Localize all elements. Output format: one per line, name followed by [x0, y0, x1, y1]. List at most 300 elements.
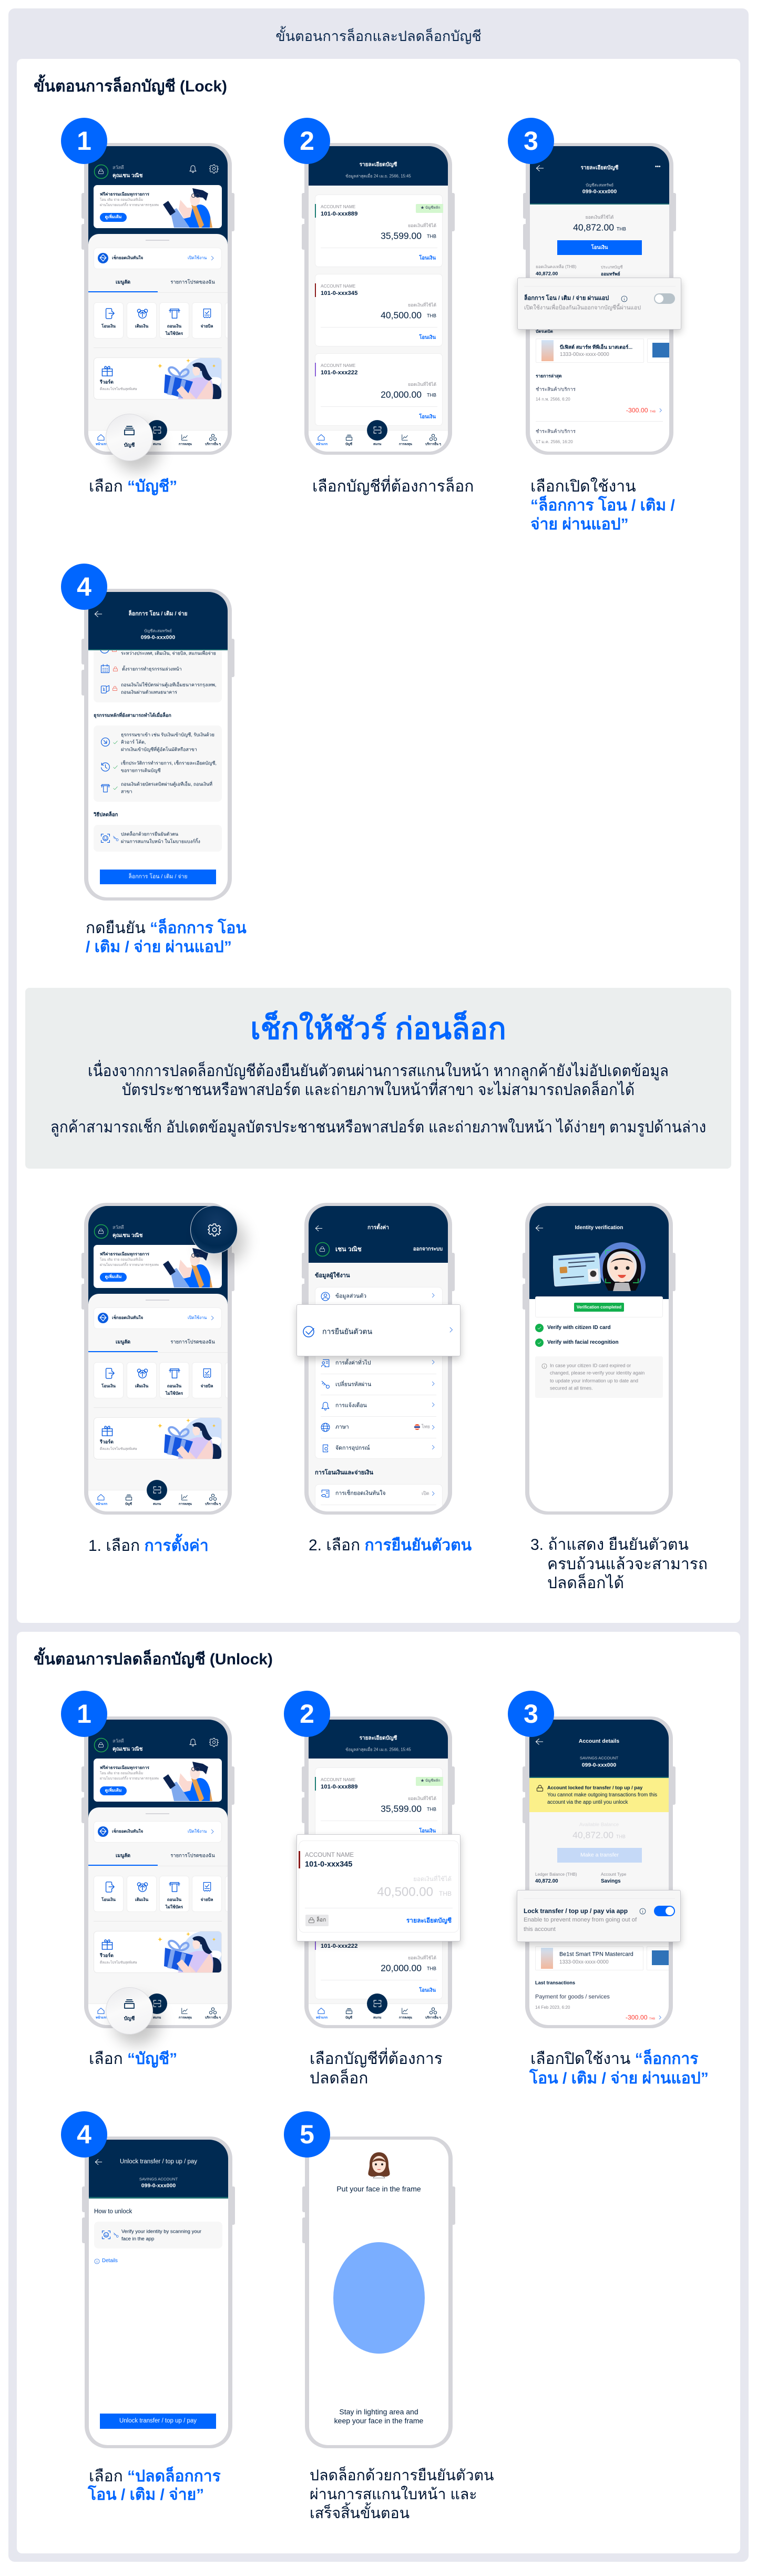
phone: confirm lock: ล็อกการ โอน / เติม / จ่าย — [128, 874, 188, 880]
unlock step 5 — [284, 2111, 494, 2522]
phone: home with settings: ถอนเงิน — [167, 1384, 181, 1388]
phone: locked account details: account via the app until you unlock — [547, 1800, 628, 1805]
unlock caption 5: ปลดล็อกด้วยการยืนยันตัวตน — [310, 2467, 494, 2484]
phone: home screen: คุณเชน วณิช — [112, 173, 142, 179]
phone: locked account details: 14 Feb 2023, 6:20 — [535, 2005, 570, 2010]
phone: home with settings: เมนูลัด — [116, 1339, 130, 1345]
popup: identity verification: การยืนยันตัวตน — [322, 1327, 372, 1336]
phone: locked account details: Account Type — [601, 1872, 626, 1877]
phone: identity verification: to update your information up to date and — [550, 1378, 638, 1383]
caption 3: เลือกเปิดใช้งาน — [530, 478, 636, 495]
account card 2: ยอดเงินที่ใช้ได้ — [408, 302, 436, 308]
unlock badge 4 — [61, 2111, 107, 2158]
unlock caption 5 line 2: ผ่านการสแกนใบหน้า และ — [310, 2486, 477, 2503]
phone: identity verification: Identity verification — [575, 1225, 623, 1231]
account card 3 — [315, 1927, 443, 1999]
phone: confirm lock: คิวอาร์ โค้ด, — [121, 740, 146, 745]
phone: locked account details: 099-0-xxx000 — [582, 1762, 616, 1769]
popup: lock toggle off: เปิดใช้งานเพื่อป้องกันเงินออกจากบัญชีนี้ผ่านแอป — [524, 305, 641, 311]
badge 2 — [284, 118, 330, 164]
phone: home with settings: คุณเชน วณิช — [112, 1233, 142, 1239]
phone: locked account details: Make a transfer — [580, 1852, 619, 1858]
unlock badge 2 — [284, 1691, 330, 1737]
phone: account list: บัญชี — [345, 443, 352, 446]
body text line 3: ลูกค้าสามารถเช็ก อัปเดตข้อมูลบัตรประชาชนหรือพาสปอร์ต และถ่ายภาพใบหน้า ได้ง่ายๆ ตามรูปด้านล่าง — [50, 1119, 706, 1136]
popup: locked account — [296, 1834, 461, 1941]
body text line 2: บัตรประชาชนหรือพาสปอร์ต และถ่ายภาพใบหน้าที่สาขา จะไม่สามารถปลดล็อกได้ — [122, 1081, 635, 1099]
phone: home screen: โอนเงิน — [101, 1897, 116, 1902]
phone: account details: 14 ก.พ. 2566, 6:20 — [536, 397, 570, 402]
phone: home screen: เช็กยอดเงินทันใจ — [112, 1829, 143, 1834]
account card 3: โอนเงิน — [419, 414, 436, 420]
phone: locked account details: Be1st Smart TPN Mastercard — [559, 1951, 633, 1958]
account card 1: 101-0-xxx889 — [321, 1784, 357, 1790]
unlock caption 2: เลือกบัญชีที่ต้องการ — [310, 2050, 443, 2068]
phone: home screen: ดีลและโปรโมชันสุดพิเศษ — [100, 1961, 137, 1965]
unlock badge 4: 4 — [77, 2120, 91, 2149]
phone: confirm lock: ปลดล็อกด้วยการยืนยันตัวตน — [121, 832, 178, 837]
phone: home screen: ถอนเงิน — [167, 1897, 181, 1902]
phone: home with settings: สแกน — [153, 1502, 161, 1506]
magnifier: account tab — [106, 414, 153, 461]
phone: home with settings: ดูเพิ่มเติม — [105, 1274, 121, 1279]
account card 3: 101-0-xxx222 — [321, 370, 357, 376]
phone: account list — [302, 143, 455, 455]
magnifier: account tab: บัญชี — [124, 442, 135, 448]
phone: identity verification: Verification completed — [577, 1305, 621, 1310]
phone: home screen: ไม่ใช้บัตร — [166, 331, 183, 336]
phone: confirm lock — [81, 589, 234, 901]
phone: account details: ออมทรัพย์ — [601, 271, 620, 277]
popup: lock toggle off — [517, 278, 681, 330]
unlock caption 4: เลือก “ปลดล็อกการ — [89, 2468, 221, 2485]
account card 2: 40,500.00 — [381, 310, 422, 321]
phone: account list: สแกน — [373, 2016, 381, 2019]
phone: locked account details: SAVINGS ACCOUNT — [580, 1755, 618, 1760]
phone: account details: ยอดเงินที่ใช้ได้ — [586, 214, 613, 220]
phone: home screen: โอน เติม จ่าย ถอนเงินเอทีเอ็ม — [100, 1772, 143, 1775]
account card 3: THB — [427, 393, 436, 398]
phone: home screen: ผ่านโมบายแบงก์กิ้ง จากธนาคารกรุงเทพ — [100, 1777, 159, 1781]
check caption 3: 3. ถ้าแสดง ยืนยันตัวตน — [530, 1536, 689, 1553]
phone: unlock confirm — [82, 2137, 235, 2448]
popup: lock toggle off: ล็อกการ โอน / เติม / จ่าย ผ่านแอป — [524, 295, 609, 301]
badge 3 — [508, 118, 554, 164]
phone: home screen — [81, 1716, 234, 2051]
unlock caption 4 line 2: โอน / เติม / จ่าย” — [88, 2486, 204, 2503]
popup: lock toggle on: this account — [524, 1926, 556, 1933]
phone: account list: ข้อมูลล่าสุดเมื่อ 24 เม.ย. 2566, 15:45 — [345, 1747, 411, 1752]
phone: locked account details: Savings — [601, 1878, 621, 1884]
unlock caption 5 line 3: เสร็จสิ้นขั้นตอน — [310, 2505, 410, 2522]
popup: lock toggle on: Enable to prevent money from going out of — [524, 1917, 637, 1923]
account card 3: 20,000.00 — [381, 1963, 422, 1974]
popup: locked account: ล็อก — [316, 1917, 326, 1923]
account card 3: ACCOUNT NAME — [321, 363, 355, 368]
phone: home screen: ฟรีค่าธรรมเนียมทุกรายการ — [100, 192, 149, 197]
account card 1: 35,599.00 — [381, 230, 422, 241]
caption 4: กดยืนยัน “ล็อกการ โอน — [86, 919, 247, 937]
phone: account details: บัญชีสะสมทรัพย์ — [586, 183, 613, 187]
caption 4 line 2: / เติม / จ่าย ผ่านแอป” — [86, 938, 232, 956]
phone: home screen: ดีลและโปรโมชันสุดพิเศษ — [100, 387, 137, 391]
phone: confirm lock: ถอนเงินไม่ใช้บัตรผ่านตู้เอทีเอ็มธนาคารกรุงเทพ, — [121, 682, 216, 688]
unlock badge 3: 3 — [524, 1699, 538, 1729]
phone: locked account details: Available Balance — [579, 1822, 619, 1827]
panel: lock steps — [17, 59, 740, 1623]
phone: confirm lock: วิธีปลดล็อก — [94, 812, 118, 817]
phone: settings: การตั้งค่า — [367, 1225, 389, 1231]
popup: lock toggle on — [517, 1890, 681, 1942]
unlock step 3 — [508, 1691, 709, 2087]
phone: account details: ••• — [655, 164, 661, 170]
phone: home with settings: เติมเงิน — [135, 1384, 148, 1388]
phone: account list: สแกน — [373, 443, 381, 446]
caption 3 emphasis line 2: จ่าย ผ่านแอป” — [530, 516, 629, 533]
unlock badge 1 — [61, 1691, 107, 1737]
phone: locked account details — [513, 1716, 684, 2028]
account card 3: THB — [427, 1966, 436, 1971]
account card 1: โอนเงิน — [419, 255, 436, 261]
phone: home with settings: บัญชี — [125, 1502, 132, 1506]
phone: account list — [293, 1716, 464, 2028]
phone: unlock confirm: Details — [102, 2258, 118, 2264]
phone: home with settings: ฟรีค่าธรรมเนียมทุกรายการ — [100, 1252, 149, 1256]
phone: home screen: เปิดใช้งาน — [188, 1829, 207, 1834]
phone: home screen: รีวอร์ด — [100, 380, 114, 385]
phone: account list: บริการอื่น ๆ — [425, 2016, 441, 2019]
account card 3: ยอดเงินที่ใช้ได้ — [408, 382, 436, 387]
phone: account details: บีเฟิสต์ สมาร์ท ทีพีเอ็น มาสเตอร์... — [560, 344, 632, 350]
phone: settings: ข้อมูลส่วนตัว — [335, 1293, 366, 1300]
phone: unlock confirm: Unlock transfer / top up / pay — [119, 2418, 197, 2424]
phone: settings: การโอนเงินและจ่ายเงิน — [315, 1469, 373, 1476]
phone: home screen: การลงทุน — [179, 443, 192, 446]
phone: account list: ข้อมูลล่าสุดเมื่อ 24 เม.ย. 2566, 15:45 — [345, 173, 411, 178]
account card 2: 101-0-xxx345 — [321, 290, 357, 297]
phone: home screen: เมนูลัด — [116, 1853, 130, 1858]
popup: identity verification — [296, 1304, 461, 1356]
phone: account details: รายการล่าสุด — [536, 373, 561, 379]
phone: account details: บัตรเดบิต — [536, 329, 553, 334]
panel: check before locking — [25, 988, 731, 1169]
phone: unlock confirm: face in the app — [121, 2236, 154, 2242]
account card 2 — [315, 274, 443, 346]
account card 1 — [315, 1767, 443, 1840]
phone: home screen: สแกน — [153, 443, 161, 446]
phone: identity verification: Verify with citizen ID card — [547, 1325, 611, 1331]
magnifier: settings gear — [190, 1205, 238, 1254]
badge 1 — [61, 118, 107, 164]
phone: account list: บริการอื่น ๆ — [425, 443, 441, 446]
phone: settings: ภาษา — [335, 1424, 349, 1430]
phone: home screen: เติมเงิน — [135, 324, 148, 329]
phone: confirm lock: ผ่านการสแกนใบหน้า ในโมบายแบงก์กิ้ง — [121, 839, 200, 844]
phone: identity verification — [523, 1203, 676, 1515]
phone: home screen — [81, 143, 234, 478]
phone: home screen: การลงทุน — [179, 2016, 192, 2019]
account card 1: ยอดเงินที่ใช้ได้ — [408, 1796, 436, 1801]
phone: confirm lock: ฝากเงินเข้าบัญชีที่ตู้อัตโนมัติหรือสาขา — [121, 747, 197, 752]
account card 1: ACCOUNT NAME — [321, 1777, 355, 1782]
caption 1: เลือก “บัญชี” — [89, 478, 177, 495]
phone: account details: 17 ม.ค. 2566, 16:20 — [536, 439, 573, 444]
heading: lock steps: ขั้นตอนการล็อกบัญชี (Lock) — [34, 78, 227, 95]
phone: confirm lock: ตั้งรายการทำธุรกรรมล่วงหน้า — [122, 667, 182, 672]
phone: home with settings: ไม่ใช้บัตร — [166, 1391, 183, 1396]
phone: home with settings: จ่ายบิล — [201, 1384, 213, 1388]
check caption 3 line 2: ครบถ้วนแล้วจะสามารถ — [547, 1556, 708, 1573]
avatar — [368, 2152, 390, 2179]
unlock badge 2: 2 — [300, 1699, 314, 1729]
phone: account details — [514, 143, 685, 455]
phone: confirm lock: ถอนเงินผ่านตัวแทนธนาคาร — [121, 690, 177, 695]
phone: account details: ชำระสินค้า/บริการ — [536, 428, 576, 434]
account card 1: โอนเงิน — [419, 1828, 436, 1834]
phone: home screen: ไม่ใช้บัตร — [166, 1905, 183, 1909]
phone: home screen: ดูเพิ่มเติม — [105, 1788, 121, 1793]
phone: face scan: keep your face in the frame — [334, 2417, 423, 2425]
phone: confirm lock: ถอนเงินด้วยบัตรเดบิตผ่านตู้เอทีเอ็ม, ถอนเงินที่ — [121, 782, 212, 787]
phone: home with settings: โอน เติม จ่าย ถอนเงินเอทีเอ็ม — [100, 1258, 143, 1262]
popup: lock toggle on: Lock transfer / top up / pay via app — [524, 1907, 628, 1915]
unlock step 2 — [284, 1691, 464, 2087]
phone: home screen: คุณเชน วณิช — [112, 1746, 142, 1752]
phone: account details: ยอดเงินคงเหลือ (THB) — [536, 264, 576, 269]
phone: settings: การตั้งค่าทั่วไป — [335, 1360, 371, 1366]
check caption 1: 1. เลือก การตั้งค่า — [88, 1537, 209, 1555]
account card 1: 101-0-xxx889 — [321, 211, 357, 217]
illustration: ID card and face — [553, 1242, 646, 1291]
phone: account details: 1333-00xx-xxxx-0000 — [560, 352, 609, 357]
account card 1: ★ บัญชีหลัก — [421, 206, 440, 210]
step 2: lock — [284, 118, 474, 495]
account card 2: THB — [427, 313, 436, 319]
caption 3 emphasis: “ล็อกการ โอน / เติม / — [530, 497, 675, 514]
check caption 3 line 3: ปลดล็อกได้ — [547, 1575, 624, 1592]
phone: identity verification: In case your citizen ID card expired or — [550, 1363, 631, 1368]
badge 2: 2 — [300, 126, 314, 156]
account card 3: 20,000.00 — [381, 389, 422, 400]
phone: account list: รายละเอียดบัญชี — [360, 162, 397, 168]
phone: unlock confirm: How to unlock — [94, 2209, 132, 2215]
phone: identity verification: secured at all times. — [550, 1385, 593, 1391]
phone: unlock confirm: 099-0-xxx000 — [141, 2183, 176, 2189]
badge 3: 3 — [524, 126, 538, 156]
unlock badge 5: 5 — [300, 2120, 314, 2149]
phone: account details: 099-0-xxx000 — [582, 189, 617, 195]
phone: home with settings: เปิดใช้งาน — [188, 1315, 207, 1320]
phone: home screen: เมนูลัด — [116, 279, 130, 285]
phone: home screen: บริการอื่น ๆ — [205, 443, 221, 446]
phone: home screen: รายการโปรดของฉัน — [170, 1853, 215, 1858]
magnifier: account tab — [106, 1987, 153, 2035]
unlock caption 3: เลือกปิดใช้งาน “ล็อกการ — [530, 2050, 698, 2068]
phone: account details: รายละเอียดบัญชี — [581, 165, 618, 171]
phone: confirm lock: บัญชีสะสมทรัพย์ — [144, 629, 172, 633]
phone: confirm lock: 099-0-xxx000 — [141, 635, 175, 641]
phone: locked account details: 1333-00xx-xxxx-0000 — [559, 1959, 609, 1965]
phone: settings: ข้อมูลผู้ใช้งาน — [315, 1272, 350, 1279]
phone: home screen: เปิดใช้งาน — [188, 255, 207, 260]
badge 4 — [61, 564, 107, 610]
phone: account details: 40,872.00 THB — [573, 222, 626, 232]
account card 1: 35,599.00 — [381, 1803, 422, 1814]
phone: settings: จัดการอุปกรณ์ — [335, 1445, 370, 1451]
phone: home with settings: เช็กยอดเงินทันใจ — [112, 1315, 143, 1320]
phone: home screen: โอน เติม จ่าย ถอนเงินเอทีเอ็ม — [100, 198, 143, 202]
phone: unlock confirm: Verify your identity by scanning your — [121, 2229, 201, 2234]
unlock badge 5 — [284, 2111, 330, 2158]
check step 2 — [293, 1203, 472, 1554]
body text line 1: เนื่องจากการปลดล็อกบัญชีต้องยืนยันตัวตนผ่านการสแกนใบหน้า หากลูกค้ายังไม่อัปเดตข้อมูล — [88, 1062, 669, 1080]
phone: home screen: หน้าแรก — [96, 2016, 107, 2019]
phone: home with settings: รายการโปรดของฉัน — [170, 1339, 215, 1345]
phone: settings: ไทย — [422, 1424, 430, 1429]
account card 1: ★ บัญชีหลัก — [421, 1779, 440, 1783]
phone: locked account details: -300.00 THB — [626, 2014, 655, 2021]
account card 3: 101-0-xxx222 — [321, 1943, 357, 1949]
popup: locked account: 40,500.00 — [377, 1885, 433, 1899]
phone: home screen: ดูเพิ่มเติม — [105, 214, 121, 219]
phone: account details: -300.00 THB — [626, 407, 656, 414]
phone: locked account details: 40,872.00 — [535, 1878, 558, 1884]
panel: unlock steps — [17, 1632, 740, 2553]
badge 4: 4 — [77, 572, 91, 601]
caption 2: เลือกบัญชีที่ต้องการล็อก — [312, 478, 474, 495]
phone: unlock confirm: SAVINGS ACCOUNT — [139, 2176, 178, 2181]
phone: home screen: สวัสดี — [112, 165, 124, 170]
phone: confirm lock: เช็กประวัติการทำรายการ, เช็กรายละเอียดบัญชี, — [121, 761, 217, 766]
phone: face scan: Stay in lighting area and — [339, 2408, 418, 2416]
phone: identity verification: Verify with facial recognition — [547, 1340, 619, 1345]
phone: home screen: ผ่านโมบายแบงก์กิ้ง จากธนาคารกรุงเทพ — [100, 203, 159, 207]
phone: home with settings: การลงทุน — [179, 1502, 192, 1506]
unlock caption 2 line 2: ปลดล็อก — [310, 2070, 368, 2087]
phone: locked account details: 40,872.00 THB — [572, 1829, 626, 1840]
popup: locked account: THB — [439, 1890, 452, 1897]
phone: home with settings: หน้าแรก — [96, 1502, 107, 1506]
account card 2: ACCOUNT NAME — [321, 284, 355, 289]
phone: home with settings: สวัสดี — [112, 1225, 124, 1230]
phone: settings: การแจ้งเตือน — [335, 1403, 367, 1409]
heading: unlock steps: ขั้นตอนการปลดล็อกบัญชี (Unlock) — [34, 1651, 273, 1668]
phone: account list: การลงทุน — [399, 2016, 412, 2019]
account card 3: โอนเงิน — [419, 1987, 436, 1993]
phone: home screen: ถอนเงิน — [167, 324, 181, 329]
phone: identity verification: changed, please re-verify your identity again — [550, 1370, 645, 1375]
unlock step 4 — [61, 2111, 235, 2503]
popup: locked account: ACCOUNT NAME — [305, 1852, 354, 1858]
phone: account details: โอนเงิน — [591, 244, 608, 250]
phone: account list: บัญชี — [345, 2016, 352, 2019]
unlock caption 3 line 2: โอน / เติม / จ่าย ผ่านแอป” — [529, 2070, 709, 2087]
account card 1: THB — [427, 1807, 436, 1812]
check step 3 — [523, 1203, 708, 1592]
phone: home with settings: ดีลและโปรโมชันสุดพิเศษ — [100, 1447, 137, 1451]
step 1: lock — [61, 118, 234, 495]
phone: home screen: สแกน — [153, 2016, 161, 2019]
phone: home screen: เช็กยอดเงินทันใจ — [112, 255, 143, 260]
phone: home with settings: บริการอื่น ๆ — [205, 1502, 221, 1506]
phone: confirm lock: ธุรกรรมหลักที่ยังสามารถทำได้เมื่อล็อก — [94, 713, 171, 718]
phone: home with settings: รีวอร์ด — [100, 1439, 114, 1445]
phone: settings: เปิด — [422, 1491, 429, 1496]
phone: locked account details: Payment for goods / services — [535, 1994, 610, 2000]
popup: locked account: 101-0-xxx345 — [305, 1860, 352, 1868]
phone: account list: หน้าแรก — [316, 443, 328, 446]
phone: settings: ออกจากระบบ — [413, 1246, 443, 1252]
phone: face scan: Put your face in the frame — [336, 2185, 421, 2193]
account card 3: ยอดเงินที่ใช้ได้ — [408, 1955, 436, 1960]
account card 1: THB — [427, 234, 436, 239]
magnifier: account tab: บัญชี — [124, 2016, 135, 2021]
phone: face scan — [302, 2137, 455, 2448]
account card 3 — [315, 353, 443, 426]
phone: settings: การเช็กยอดเงินทันใจ — [335, 1490, 386, 1497]
phone: home screen: รายการโปรดของฉัน — [170, 279, 215, 285]
phone: locked account details: Ledger Balance (THB) — [535, 1872, 577, 1877]
unlock caption 1: เลือก “บัญชี” — [89, 2050, 177, 2068]
unlock badge 3 — [508, 1691, 554, 1737]
phone: home screen: จ่ายบิล — [201, 1897, 213, 1902]
phone: home screen: สวัสดี — [112, 1739, 124, 1744]
step 4: lock — [61, 564, 247, 956]
phone: settings: เปลี่ยนรหัสผ่าน — [335, 1382, 371, 1388]
phone: home with settings: ผ่านโมบายแบงก์กิ้ง จากธนาคารกรุงเทพ — [100, 1263, 159, 1267]
phone: home with settings: โอนเงิน — [101, 1384, 116, 1388]
phone: home screen: บริการอื่น ๆ — [205, 2016, 221, 2019]
phone: account details: ชำระสินค้า/บริการ — [536, 386, 576, 392]
step 3: lock — [508, 118, 685, 533]
phone: account details: 40,872.00 — [536, 271, 558, 277]
popup: locked account: ยอดเงินที่ใช้ได้ — [413, 1876, 452, 1883]
check caption 2: 2. เลือก การยืนยันตัวตน — [309, 1537, 472, 1554]
phone: home screen: โอนเงิน — [101, 324, 116, 329]
phone: unlock confirm: Unlock transfer / top up / pay — [120, 2159, 197, 2165]
phone: home screen: หน้าแรก — [96, 443, 107, 446]
title: ขั้นตอนการล็อกและปลดล็อกบัญชี — [275, 28, 482, 44]
phone: confirm lock: สาขา — [121, 789, 132, 794]
phone: account list: รายละเอียดบัญชี — [360, 1735, 397, 1741]
phone: home screen: เติมเงิน — [135, 1897, 148, 1902]
check step 1 — [81, 1203, 252, 1555]
phone: account details: ประเภทบัญชี — [601, 265, 623, 269]
phone: confirm lock: ล็อกการ โอน / เติม / จ่าย — [128, 611, 188, 617]
phone: home screen: จ่ายบิล — [201, 324, 213, 329]
phone: locked account details: Account locked for transfer / top up / pay — [547, 1785, 642, 1790]
account card 2: โอนเงิน — [419, 334, 436, 340]
account card 1: ยอดเงินที่ใช้ได้ — [408, 223, 436, 228]
phone: account list: การลงทุน — [399, 443, 412, 446]
phone: confirm lock: ขอรายการเดินบัญชี — [121, 768, 161, 773]
heading: check: เช็กให้ชัวร์ ก่อนล็อก — [250, 1012, 506, 1046]
unlock badge 1: 1 — [77, 1699, 91, 1729]
account card 1 — [315, 195, 443, 267]
account card 1: ACCOUNT NAME — [321, 205, 355, 209]
face frame oval — [333, 2242, 425, 2354]
phone: locked account details: Account details — [579, 1739, 619, 1744]
phone: settings — [293, 1203, 464, 1515]
phone: confirm lock: ธุรกรรมขาเข้า เช่น รับเงินเข้าบัญชี, รับเงินด้วย — [121, 732, 214, 738]
phone: locked account details: You cannot make outgoing transactions from this — [547, 1792, 657, 1798]
phone: home screen: ฟรีค่าธรรมเนียมทุกรายการ — [100, 1765, 149, 1770]
phone: home with settings — [81, 1203, 252, 1515]
unlock step 1 — [61, 1691, 234, 2068]
phone: settings: เชน วณิช — [335, 1245, 362, 1253]
phone: home screen: รีวอร์ด — [100, 1953, 114, 1958]
phone: confirm lock: ระหว่างประเทศ, เติมเงิน, จ่ายบิล, สแกนเพื่อจ่าย — [121, 651, 216, 656]
